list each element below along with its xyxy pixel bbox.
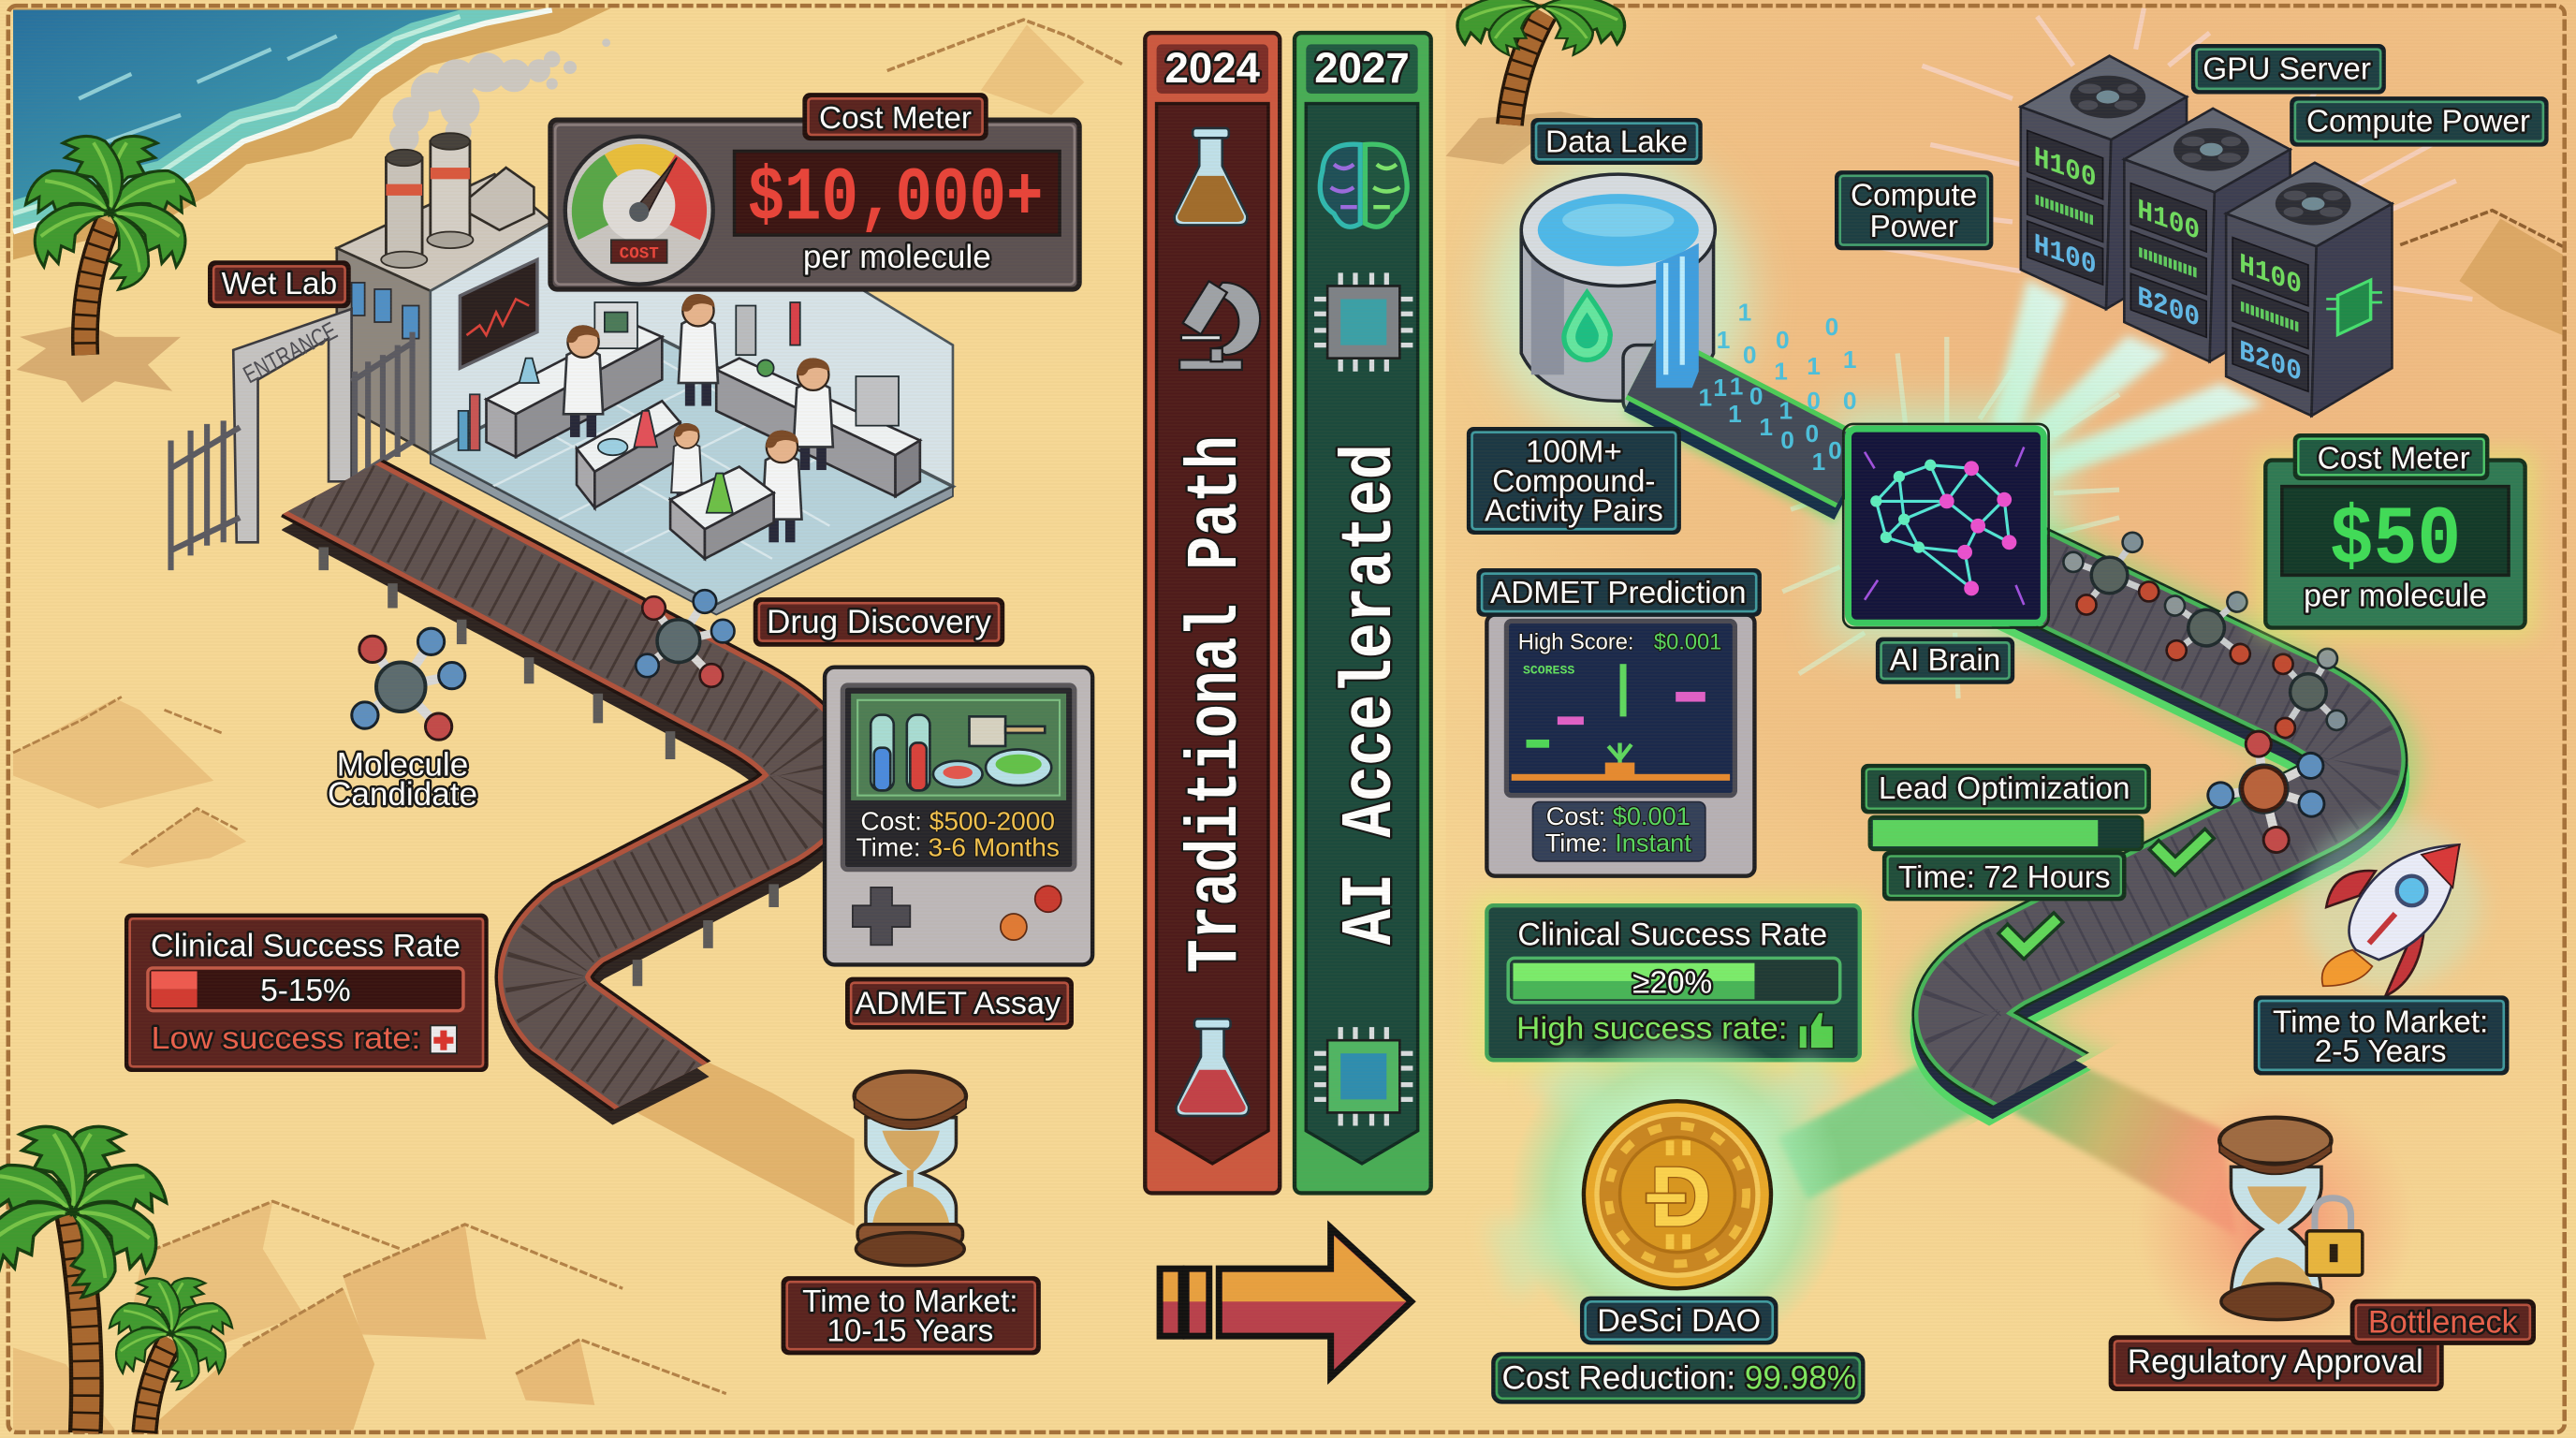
binary data stream: 1 bbox=[1812, 448, 1825, 476]
progress bar: ≥20% bbox=[1632, 965, 1712, 1000]
vertical text: traditional path: Traditional Path bbox=[1177, 435, 1258, 973]
label: time to market AI bbox=[2256, 998, 2507, 1073]
year: 2024 bbox=[1165, 44, 1261, 92]
ocean and shoreline bbox=[13, 8, 611, 259]
roof bbox=[337, 174, 552, 291]
lab walls bbox=[431, 165, 953, 487]
gauge bbox=[565, 137, 713, 285]
label: ai brain: AI Brain bbox=[1890, 643, 2000, 678]
inner panel bbox=[1306, 104, 1418, 1164]
binary data stream: 0 bbox=[1749, 382, 1764, 410]
label: compute power right: Compute Power bbox=[2306, 104, 2530, 139]
binary data stream: 0 bbox=[1780, 426, 1794, 454]
wall monitor bbox=[460, 259, 537, 368]
icon: thumbs up bbox=[1799, 1012, 1834, 1049]
clinical success panel traditional bbox=[126, 916, 487, 1070]
binary data stream: 1 bbox=[1759, 413, 1773, 441]
ADMET assay device: Time: 3-6 Months bbox=[856, 833, 1060, 862]
label: regulatory approval bbox=[2111, 1338, 2441, 1388]
label: compound activity pairs: Compound- bbox=[1492, 464, 1655, 499]
front desk bbox=[670, 467, 774, 559]
label: time to market AI: 2-5 Years bbox=[2315, 1034, 2447, 1069]
d-pad bbox=[853, 888, 910, 945]
icon: red flask bbox=[1176, 1019, 1249, 1116]
binary data stream: 1 bbox=[1778, 397, 1793, 425]
progress bar: 5-15% bbox=[260, 974, 351, 1008]
icon: brown flask bbox=[1175, 128, 1247, 225]
binary data stream: 1 bbox=[1774, 358, 1788, 386]
binary data stream: 0 bbox=[1825, 313, 1838, 341]
icon: chip lower bbox=[1314, 1027, 1412, 1125]
icon: green drop bbox=[1564, 292, 1610, 360]
display bbox=[2282, 487, 2509, 575]
right scene glow and rays bbox=[1486, 8, 2472, 698]
entrance gate bbox=[171, 309, 414, 570]
ADMET prediction device bbox=[1486, 615, 1754, 876]
lead optimization panel: Time: 72 Hours bbox=[1898, 860, 2111, 895]
year: 2027 bbox=[1314, 44, 1410, 92]
progress bar bbox=[1869, 816, 2143, 850]
scientists front bbox=[671, 423, 801, 542]
GPU servers bbox=[2021, 56, 2392, 416]
title: Clinical Success Rate bbox=[1517, 917, 1827, 952]
binary data stream: 0 bbox=[1807, 387, 1821, 415]
high success: High success rate: bbox=[1516, 1011, 1788, 1046]
conveyor legs bbox=[324, 548, 774, 986]
palm tree bottom-left bbox=[0, 1116, 168, 1433]
binary data stream: 1 bbox=[1730, 372, 1743, 400]
back lab desks bbox=[487, 324, 920, 496]
small palm tree bottom-left bbox=[108, 1271, 234, 1433]
AI brain bbox=[1843, 424, 2049, 628]
banner: 2024 traditional path bbox=[1145, 33, 1280, 1193]
hourglass traditional bbox=[855, 1072, 966, 1266]
palm tree top-left bbox=[17, 126, 197, 403]
banner: 2027 ai accelerated bbox=[1295, 33, 1431, 1193]
label: ADMET assay: ADMET Assay bbox=[855, 986, 1061, 1021]
binary data stream: 1 bbox=[1807, 352, 1821, 380]
server 2: B200 bbox=[2137, 281, 2200, 336]
server 1: H100 bbox=[2034, 228, 2097, 283]
label: ADMET prediction: ADMET Prediction bbox=[1490, 576, 1747, 610]
AI conveyor belt to brain bbox=[1643, 365, 1853, 487]
binary data stream: 1 bbox=[1713, 374, 1727, 402]
DeSci coin bbox=[1486, 1027, 1848, 1362]
label: compute power left: Compute bbox=[1851, 178, 1977, 213]
front lab desks bbox=[577, 401, 681, 507]
bench equipment bbox=[520, 302, 899, 426]
roof unit bbox=[470, 168, 534, 230]
label: wet lab bbox=[211, 263, 348, 306]
server 1 bbox=[2021, 56, 2187, 309]
admet stats: Time: Instant bbox=[1545, 828, 1691, 857]
low success: Low success rate: bbox=[151, 1021, 420, 1056]
label: compute power left bbox=[1837, 172, 1991, 248]
binary data stream: 0 bbox=[1776, 326, 1790, 354]
palm tree top-center bbox=[1445, 0, 1635, 165]
icon: chip bbox=[1314, 272, 1412, 372]
cost meter panel AI: $50 bbox=[2330, 494, 2461, 587]
label: data lake: Data Lake bbox=[1545, 125, 1688, 159]
trail to coin and hourglass bbox=[1778, 1064, 2415, 1364]
binary data stream: 1 bbox=[1698, 384, 1712, 412]
icon: medical cross bbox=[431, 1025, 457, 1053]
per molecule: per molecule bbox=[2304, 579, 2487, 614]
label: wet lab: Wet Lab bbox=[222, 267, 337, 301]
lead optimization panel bbox=[1863, 766, 2149, 899]
lead optimization panel: Lead Optimization bbox=[1879, 771, 2130, 806]
cost meter panel traditional bbox=[550, 95, 1079, 289]
left conveyor belt bbox=[304, 474, 812, 1119]
label: desci dao bbox=[1582, 1299, 1776, 1343]
game field: SCORESS bbox=[1523, 664, 1574, 678]
icon: microscope bbox=[1179, 281, 1260, 370]
binary data stream: 0 bbox=[1743, 341, 1757, 369]
assay stats: Cost: $500-2000 bbox=[860, 806, 1055, 835]
test tubes bbox=[871, 715, 929, 790]
buttons bbox=[1035, 886, 1061, 912]
time bbox=[1884, 853, 2124, 899]
ADMET assay device bbox=[825, 668, 1092, 964]
binary data stream: 0 bbox=[1843, 387, 1857, 415]
cost meter panel traditional: $10,000+ bbox=[748, 156, 1043, 242]
label: ADMET assay bbox=[848, 979, 1071, 1027]
label: time to market traditional: Time to Market: bbox=[802, 1284, 1018, 1319]
waterfall bbox=[1656, 243, 1699, 388]
dishes bbox=[933, 716, 1051, 787]
label: desci dao: DeSci DAO bbox=[1597, 1303, 1761, 1339]
label: cost meter bbox=[2295, 435, 2487, 478]
binary data stream: 0 bbox=[1828, 436, 1842, 464]
icon: padlock bbox=[2306, 1198, 2363, 1275]
chimneys bbox=[386, 158, 422, 259]
label: data lake bbox=[1533, 120, 1701, 163]
inner panel bbox=[1157, 104, 1268, 1164]
smoke bbox=[389, 38, 610, 153]
label: bottleneck: Bottleneck bbox=[2368, 1305, 2519, 1341]
compute beams bbox=[1991, 279, 2264, 480]
label: time to market traditional bbox=[783, 1279, 1038, 1353]
green check marks bbox=[2008, 838, 2204, 950]
clinical success panel AI bbox=[1473, 896, 1871, 1070]
gas cylinders bbox=[459, 394, 479, 450]
molecules on AI belt bbox=[2063, 533, 2358, 863]
molecule candidate: Candidate bbox=[328, 776, 477, 813]
label: compound activity pairs: Activity Pairs bbox=[1485, 493, 1663, 528]
label: compound activity pairs: 100M+ bbox=[1526, 434, 1622, 469]
server 2: H100 bbox=[2137, 194, 2200, 249]
desk glassware bbox=[598, 411, 733, 513]
ADMET prediction device: $0.001 bbox=[1654, 630, 1721, 654]
rocket bbox=[2300, 818, 2481, 996]
label: time to market AI: Time to Market: bbox=[2273, 1005, 2488, 1039]
entrance gate: ENTRANCE bbox=[239, 316, 342, 389]
high score: High Score: bbox=[1518, 630, 1633, 654]
server 3: B200 bbox=[2239, 335, 2302, 389]
label: compound activity pairs bbox=[1469, 429, 1679, 533]
label: compute power right bbox=[2291, 98, 2546, 144]
binary data stream bbox=[1698, 298, 1857, 476]
label: gpu server: GPU Server bbox=[2203, 51, 2371, 86]
binary data stream: 1 bbox=[1843, 345, 1857, 374]
per molecule: per molecule bbox=[803, 239, 991, 275]
label: regulatory approval: Regulatory Approval bbox=[2128, 1343, 2423, 1380]
scientists bbox=[564, 294, 833, 470]
label: drug discovery: Drug Discovery bbox=[767, 604, 991, 640]
binary data stream: 1 bbox=[1738, 298, 1751, 326]
admet stats bbox=[1533, 801, 1705, 861]
molecule candidate bbox=[328, 628, 477, 813]
label: time to market traditional: 10-15 Years bbox=[827, 1313, 993, 1348]
vertical text: ai accelerated: AI Accelerated bbox=[1331, 444, 1412, 945]
LED display bbox=[735, 151, 1060, 235]
AI conveyor belt bbox=[1959, 564, 2361, 1125]
label: cost meter bbox=[805, 95, 986, 138]
server 3: H100 bbox=[2239, 248, 2302, 302]
binary data stream: 1 bbox=[1717, 326, 1730, 354]
facade bbox=[337, 248, 431, 453]
icon: brain bbox=[1320, 144, 1407, 227]
binary data stream: 1 bbox=[1728, 400, 1742, 428]
molecule candidate: Molecule bbox=[337, 747, 468, 784]
label: cost reduction: Cost Reduction: 99.98% bbox=[1501, 1359, 1856, 1396]
wet lab building bbox=[337, 133, 953, 615]
label: cost meter: Cost Meter bbox=[2318, 441, 2470, 476]
label: gpu server bbox=[2193, 46, 2384, 92]
binary data stream: 0 bbox=[1806, 419, 1819, 448]
molecule on belt bbox=[636, 590, 735, 687]
data lake tank bbox=[1521, 174, 1715, 414]
server 2 bbox=[2124, 109, 2291, 361]
title: Clinical Success Rate bbox=[151, 929, 461, 964]
transition arrow bbox=[1160, 1227, 1412, 1377]
hourglass AI with lock bbox=[2219, 1118, 2363, 1320]
admet stats: Cost: $0.001 bbox=[1546, 801, 1690, 830]
cost meter panel AI bbox=[2256, 435, 2535, 638]
label: cost meter: Cost Meter bbox=[819, 101, 972, 136]
server 3 bbox=[2226, 163, 2392, 416]
DeSci coin: D bbox=[1650, 1150, 1711, 1245]
label: ai brain bbox=[1878, 639, 2012, 682]
progress bar bbox=[148, 968, 463, 1011]
gauge: COST bbox=[620, 245, 659, 264]
progress bar bbox=[1508, 958, 1840, 1003]
neural network bbox=[1876, 465, 2009, 588]
lab floor bbox=[431, 337, 953, 605]
server 1: H100 bbox=[2034, 141, 2097, 196]
label: compute power left: Power bbox=[1869, 210, 1958, 244]
